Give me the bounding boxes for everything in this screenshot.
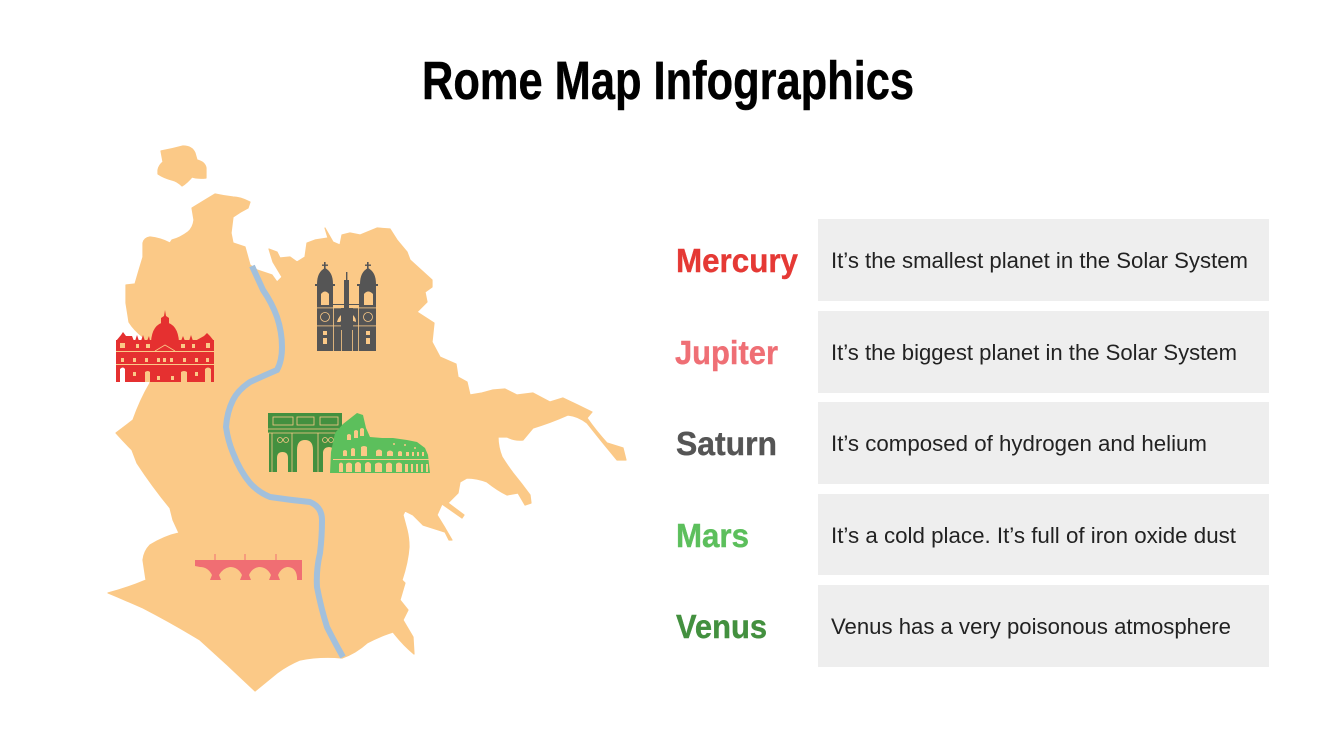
label: Mars: Mars xyxy=(676,517,749,554)
map: Tiber river xyxy=(226,266,343,657)
panel: Venus description xyxy=(818,585,1269,667)
row: Mercury xyxy=(676,219,1269,301)
row: Mars xyxy=(676,494,1269,575)
text: Mars description: It’s a cold place. It’s full of iron oxide dust xyxy=(831,523,1236,548)
panel: Saturn description xyxy=(818,402,1269,484)
label: Saturn: Saturn xyxy=(676,425,777,462)
label: Mercury: Mercury xyxy=(676,242,799,279)
panel: Mars description xyxy=(818,494,1269,575)
landmark: triumphal arch xyxy=(268,413,342,472)
landmark: St Peter's Basilica xyxy=(116,310,214,382)
map: main territory xyxy=(108,194,626,691)
row: Jupiter xyxy=(675,311,1269,393)
title: Rome Map Infographics xyxy=(422,51,914,111)
landmark: Colosseum xyxy=(330,413,430,473)
label: Jupiter: Jupiter xyxy=(675,334,778,371)
row: Venus xyxy=(676,585,1269,667)
panel: Jupiter description xyxy=(818,311,1269,393)
text: Venus description: Venus has a very poisonous atmosphere xyxy=(831,614,1231,639)
map of Rome xyxy=(108,146,626,691)
panel: Mercury description xyxy=(818,219,1269,301)
row: Saturn xyxy=(676,402,1269,484)
text: Saturn description: It’s composed of hydrogen and helium xyxy=(831,431,1207,456)
text: Mercury description: It’s the smallest planet in the Solar System xyxy=(831,248,1248,273)
text: Jupiter description: It’s the biggest planet in the Solar System xyxy=(831,340,1237,365)
map: northern island xyxy=(158,146,206,186)
label: Venus: Venus xyxy=(676,608,767,645)
landmark: Trinita dei Monti church xyxy=(315,262,378,351)
landmark: bridge xyxy=(195,554,302,580)
